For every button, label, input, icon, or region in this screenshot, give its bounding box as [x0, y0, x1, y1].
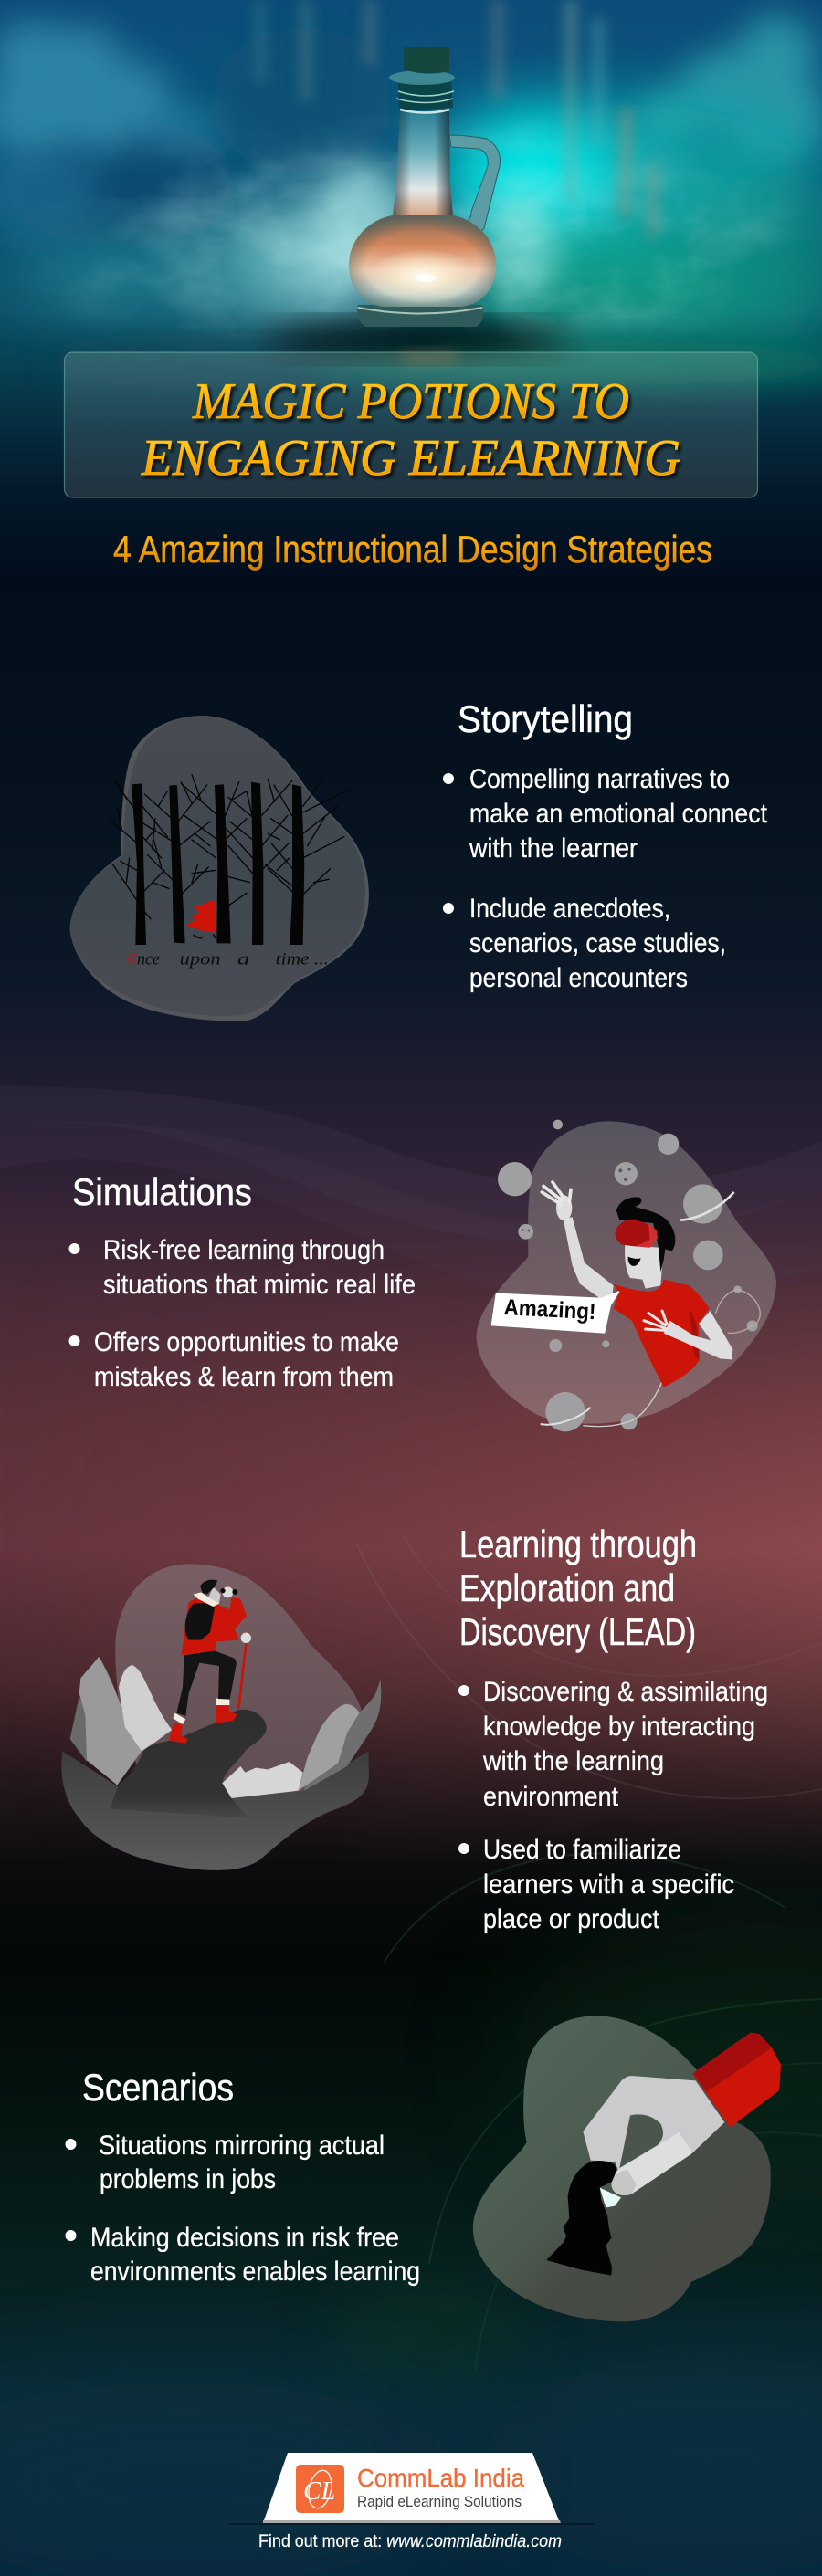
heading: LEAD: Learning through [459, 1523, 697, 1565]
heading: scenarios: Scenarios [82, 2066, 234, 2109]
illustration: hand moving chess knight [473, 2016, 781, 2321]
heading: storytelling: Storytelling [458, 697, 633, 740]
bullets: simulations: Risk-free learning through [103, 1235, 385, 1265]
logo mark: CL [303, 2477, 335, 2506]
bottle handle [449, 135, 500, 236]
trekking pole [237, 1631, 249, 1709]
section: storytelling [70, 697, 768, 1021]
once upon a time: upon [180, 949, 221, 969]
red t-shirt [614, 1280, 710, 1387]
bullets: simulations: situations that mimic real life [103, 1270, 416, 1300]
bullets: storytelling: Compelling narratives to [469, 764, 730, 794]
VR headset [615, 1220, 658, 1248]
once upon a time [127, 949, 329, 969]
red cuff [692, 2033, 781, 2128]
section: simulations [69, 1120, 776, 1431]
illustration: hiker on mountain [61, 1564, 381, 1870]
bullets: scenarios: problems in jobs [100, 2164, 276, 2194]
tree trunks [132, 782, 304, 945]
white knight ear highlight [600, 2188, 621, 2207]
title: MAGIC POTIONS TO [192, 373, 629, 430]
mouth [627, 1257, 641, 1266]
cork [404, 47, 449, 74]
raised hand [542, 1182, 572, 1220]
bullets: LEAD: Discovering & assimilating [483, 1677, 768, 1707]
once upon a time: O [127, 949, 136, 969]
title: ENGAGING ELEARNING [141, 430, 680, 487]
bullets: scenarios: Situations mirroring actual [99, 2131, 385, 2161]
bullets: LEAD: place or product [483, 1904, 660, 1934]
dark pool under bottle [264, 326, 574, 353]
speech bubble [491, 1292, 619, 1333]
planet rings and orbit [541, 1192, 760, 1427]
logo mark [296, 2465, 344, 2513]
boots [169, 1705, 237, 1744]
bullets: storytelling: with the learner [469, 833, 638, 864]
section: scenarios [66, 2016, 781, 2321]
illustration: forest blob [70, 716, 369, 1021]
bullets: LEAD: learners with a specific [483, 1869, 734, 1900]
bullets: LEAD: with the learning [482, 1746, 664, 1776]
bullets: LEAD [458, 1677, 768, 1934]
illustration: VR learner: Amazing! [503, 1295, 596, 1325]
potion bottle [349, 47, 500, 327]
chess knight [546, 2161, 616, 2276]
jacket [181, 1597, 247, 1655]
footer logo [228, 2453, 594, 2524]
footer link: Find out more at: www.commlabindia.com [258, 2532, 562, 2551]
bullets: simulations [69, 1235, 416, 1392]
bullets: scenarios: environments enables learning [90, 2257, 420, 2287]
bullets: scenarios [66, 2131, 420, 2287]
subtitle: 4 Amazing Instructional Design Strategies [113, 528, 712, 571]
bullets: LEAD: Used to familiarize [483, 1835, 681, 1865]
heading: simulations: Simulations [72, 1170, 252, 1213]
left mountains [70, 1657, 172, 1785]
bullets: storytelling: scenarios, case studies, [469, 928, 726, 958]
bullets: scenarios: Making decisions in risk free [90, 2223, 399, 2253]
section: LEAD [61, 1523, 768, 1934]
heading: LEAD: Exploration and [459, 1566, 675, 1609]
backpack [185, 1603, 215, 1640]
hair [616, 1197, 675, 1272]
once upon a time: a [237, 949, 249, 969]
trousers [176, 1650, 237, 1716]
glove [241, 1633, 251, 1643]
bullets: storytelling [443, 764, 768, 993]
bullets: storytelling: make an emotional connect [469, 799, 768, 829]
title panel [64, 351, 758, 497]
red hooded figure [185, 900, 216, 933]
hand [583, 2076, 724, 2195]
bottle body [349, 215, 496, 307]
bullets: simulations: mistakes & learn from them [94, 1362, 394, 1392]
bullets: simulations: Offers opportunities to make [94, 1327, 399, 1357]
snowy rocks [222, 1762, 303, 1798]
bullets: storytelling: personal encounters [469, 963, 688, 993]
boot cuffs [173, 1699, 229, 1724]
decorative wave bands [0, 1086, 822, 2373]
fur collar [194, 1592, 219, 1607]
lower blob [61, 1751, 369, 1870]
bare trees [110, 774, 349, 919]
once upon a time: nce [137, 949, 160, 969]
logo name: CommLab India [357, 2464, 524, 2492]
bottle base [357, 305, 483, 327]
bullets: storytelling: Include anecdotes, [469, 894, 670, 924]
neck and face [625, 1244, 665, 1289]
bottle mouth rings [398, 82, 453, 111]
illustration: VR learner [477, 1120, 776, 1431]
bullets: LEAD: knowledge by interacting [483, 1712, 755, 1742]
head [200, 1580, 221, 1604]
raised arm [564, 1217, 614, 1299]
hero smoke and glow [0, 0, 822, 385]
logo tagline: Rapid eLearning Solutions [357, 2494, 522, 2510]
heading: LEAD: Discovery (LEAD) [459, 1610, 696, 1653]
rock [110, 1710, 267, 1818]
title [141, 373, 680, 487]
bullets: LEAD: environment [483, 1782, 619, 1812]
planets [498, 1120, 758, 1431]
right mountains [299, 1680, 381, 1791]
lower arm and hand [644, 1311, 732, 1359]
once upon a time: time ... [276, 949, 329, 969]
bottle neck [393, 111, 453, 215]
heading: LEAD [459, 1523, 697, 1653]
binoculars [220, 1586, 237, 1597]
